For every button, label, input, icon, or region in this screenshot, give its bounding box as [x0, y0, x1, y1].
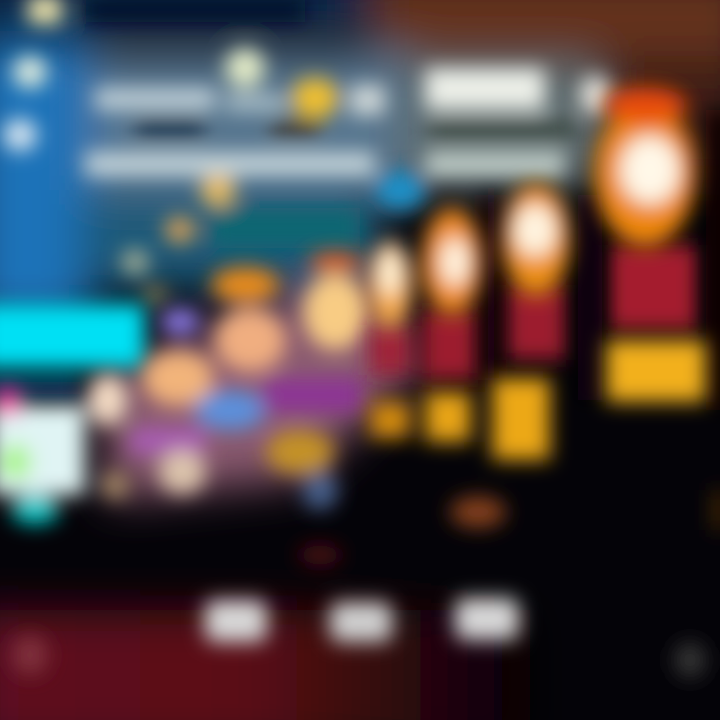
slot machine: red cabinets: [370, 245, 698, 380]
slot machine: yellow lower panels: [370, 340, 720, 530]
slot machine: glowing screens: [368, 87, 695, 329]
cyan glow band: [0, 304, 145, 396]
colorful lower-left machines: [0, 252, 367, 524]
top highlights and signage: [3, 0, 611, 305]
bottom buttons: white blobs: [12, 545, 706, 678]
slot machine: dark gaps: [484, 110, 720, 410]
